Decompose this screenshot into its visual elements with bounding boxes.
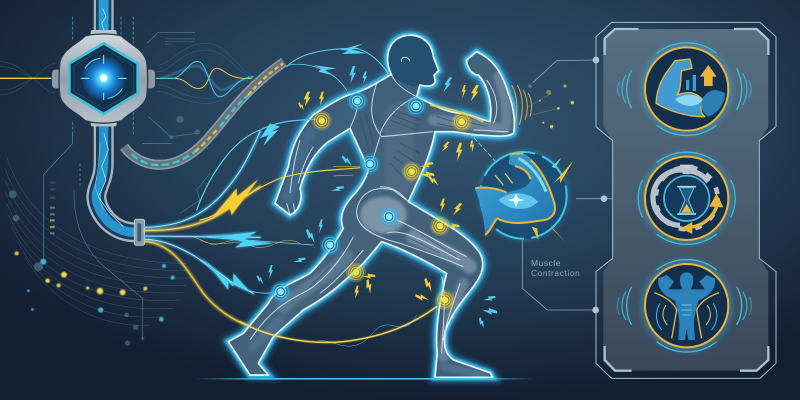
connector clamp — [134, 219, 145, 245]
runner figure — [197, 35, 514, 377]
icon: full body tone — [617, 259, 751, 352]
ground line — [195, 378, 535, 380]
panel frame — [596, 22, 776, 378]
body halo — [228, 35, 514, 377]
lightning: small bolts — [297, 84, 479, 301]
icon: contraction timing — [638, 152, 735, 245]
muscle detail lines — [250, 57, 508, 353]
body outline — [228, 35, 514, 377]
body glow — [228, 35, 514, 377]
glowing signal dots — [9, 116, 200, 346]
hub: hexagonal nerve source — [52, 30, 155, 126]
left circuit: nerve source, conduit and signal wires — [0, 0, 284, 346]
muscle activation nodes — [270, 91, 472, 310]
biceps vibration and sparks — [512, 84, 574, 128]
vertical nerve pipe — [95, 0, 135, 232]
muscle contraction label: Muscle — [531, 258, 561, 268]
yellow biceps charge — [430, 105, 483, 122]
body silhouette — [228, 35, 514, 377]
lightning: large bolts — [200, 43, 367, 292]
right side: contraction callout and panel — [469, 22, 776, 378]
icon: muscle strength up — [617, 42, 751, 136]
concentric signal arcs — [5, 157, 188, 325]
right side: contraction callout and panel: Contraction — [531, 268, 580, 278]
small data bars — [50, 38, 195, 234]
head tint — [388, 35, 439, 87]
signal wires — [145, 132, 260, 325]
muscle contraction icon — [475, 149, 573, 242]
body shading — [253, 35, 507, 375]
connector lines — [469, 60, 632, 310]
panel connector dots — [592, 57, 607, 313]
conduit: cable from hub to biceps — [124, 62, 284, 165]
signal wave — [0, 43, 260, 103]
upper nerve branches — [197, 48, 437, 346]
thin circuit traces — [43, 17, 197, 338]
